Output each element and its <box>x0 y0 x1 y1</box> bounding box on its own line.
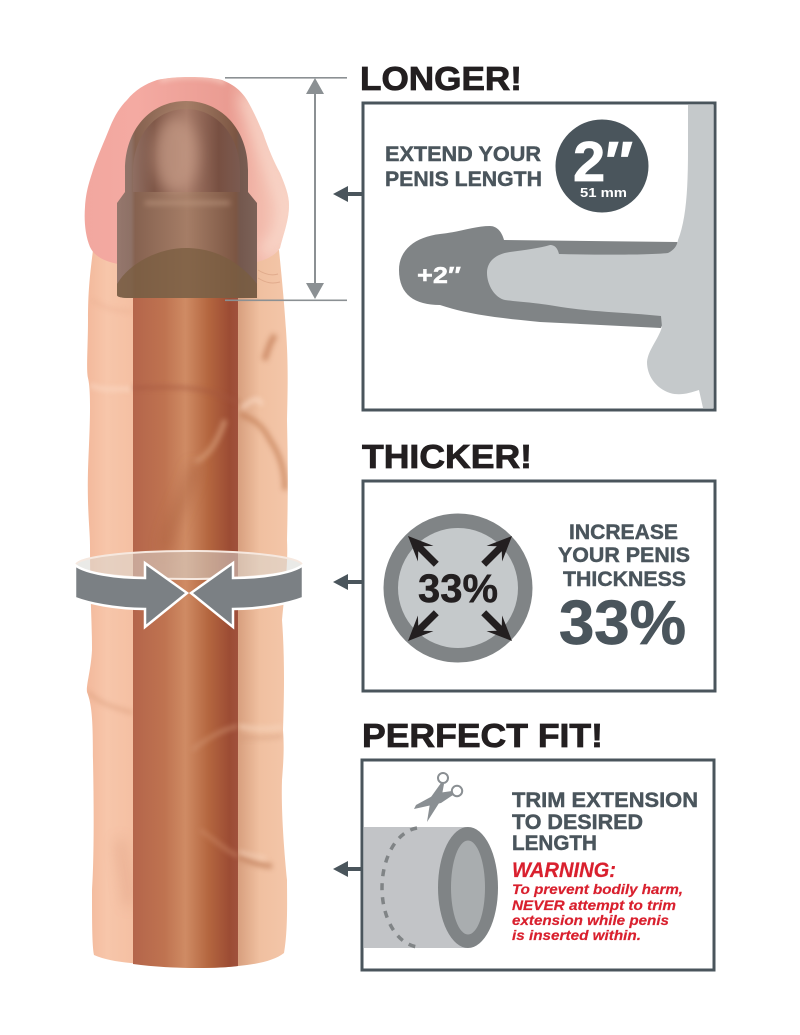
warning: NEVER attempt to trim <box>512 897 676 913</box>
icon: scissors <box>414 773 462 822</box>
ring diagram <box>384 514 532 662</box>
right arrow <box>191 563 303 627</box>
arrow: thicker <box>333 574 362 590</box>
pink head <box>85 77 289 264</box>
panel: thicker: YOUR PENIS <box>558 543 690 567</box>
body silhouette <box>487 105 713 408</box>
panel: perfect fit: LENGTH <box>512 831 597 855</box>
warning: extension while penis <box>512 912 669 928</box>
arrow: longer <box>333 186 362 202</box>
panel: perfect fit: TO DESIRED <box>512 810 643 834</box>
extension body <box>87 250 288 968</box>
inner dome <box>133 109 240 192</box>
panel: thicker: THICKNESS <box>563 567 686 591</box>
heading: perfect fit: PERFECT FIT! <box>362 717 603 754</box>
body wrinkles and veins <box>88 270 285 905</box>
warning: WARNING: <box>512 859 616 882</box>
measurement bracket <box>225 77 347 301</box>
dome highlight <box>154 117 198 193</box>
cylinder <box>364 827 498 948</box>
translucent ring <box>76 551 302 579</box>
panel: longer: PENIS LENGTH <box>385 167 542 191</box>
heading: longer: LONGER! <box>360 60 522 97</box>
thickness text: INCREASE <box>569 520 678 544</box>
warning: To prevent bodily harm, <box>512 881 683 897</box>
cap ridge <box>145 201 230 205</box>
panel: longer <box>363 103 715 410</box>
extend text: EXTEND YOUR <box>385 142 541 166</box>
infographic <box>76 66 716 972</box>
plus two label: +2″ <box>417 262 461 288</box>
large percentage: 33% <box>559 589 686 658</box>
badge: two inches: 2″ <box>573 130 633 194</box>
sleeve details <box>133 387 238 856</box>
product illustration <box>85 76 289 968</box>
arrow: perfect fit <box>333 861 362 877</box>
trim text: TRIM EXTENSION <box>512 788 698 812</box>
panel: perfect fit <box>362 760 714 970</box>
inner sleeve <box>133 296 238 968</box>
panel: thicker <box>363 481 715 691</box>
badge: two inches: 51 mm <box>580 185 627 200</box>
badge: two inches <box>556 120 648 212</box>
heading: thicker: THICKER! <box>362 438 532 475</box>
expansion arrows <box>400 528 520 649</box>
extension silhouette <box>399 226 680 328</box>
translucent cap <box>117 101 257 298</box>
warning: is inserted within. <box>512 927 641 943</box>
thickness arrows <box>75 551 303 627</box>
cap lower overlap <box>117 248 257 298</box>
ring diagram: 33% <box>418 567 498 611</box>
left arrow <box>75 563 187 627</box>
head highlight <box>160 76 285 252</box>
warning <box>512 859 683 943</box>
